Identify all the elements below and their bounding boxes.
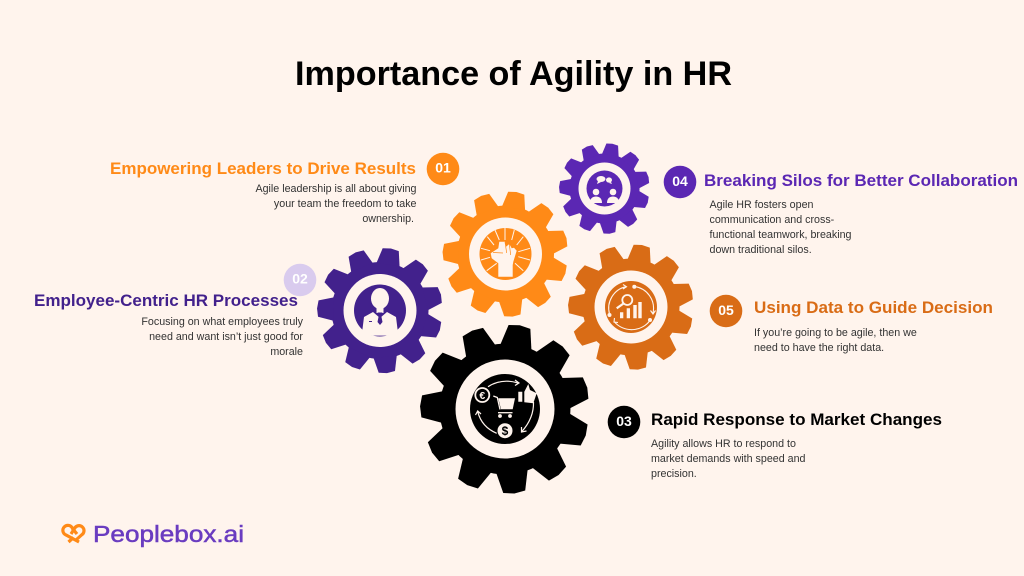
number badge 02: 02 — [292, 270, 308, 286]
step 05 — [710, 295, 993, 354]
heading 04: Breaking Silos for Better Collaboration — [704, 171, 1018, 190]
step 01 — [110, 153, 459, 225]
body 03 — [651, 438, 806, 480]
body 02 — [141, 316, 304, 358]
body 04: functional teamwork, breaking — [710, 229, 852, 241]
body 05 — [754, 327, 917, 354]
icon: cart and currency cycle — [475, 380, 537, 438]
icon: person in suit — [362, 288, 398, 336]
body 01: Agile leadership is all about giving — [255, 183, 417, 195]
icon: analytics cycle — [608, 284, 656, 330]
body 01: your team the freedom to take — [274, 198, 417, 210]
icon: two people chatting — [590, 176, 619, 203]
body 04: down traditional silos. — [710, 244, 812, 256]
body 02: morale — [270, 346, 303, 358]
step 02 — [34, 264, 316, 358]
icon: cart and currency cycle: € — [479, 390, 485, 402]
number badge 05: 05 — [718, 302, 734, 318]
icon: raised fist — [481, 228, 530, 277]
icon: cart and currency cycle: $ — [502, 424, 509, 438]
body 02: need and want isn’t just good for — [149, 331, 303, 343]
icon: logo knot — [63, 525, 84, 542]
number badge 04 — [664, 166, 696, 198]
body 03: market demands with speed and — [651, 453, 806, 465]
step 04 — [664, 166, 1018, 256]
number badge 02 — [284, 264, 316, 296]
body 03: Agility allows HR to respond to — [651, 438, 796, 450]
number badge 05 — [710, 295, 742, 327]
wordmark: Peoplebox.ai — [93, 521, 244, 547]
number badge 03: 03 — [616, 413, 632, 429]
heading 03: Rapid Response to Market Changes — [651, 410, 942, 429]
body 04: communication and cross- — [710, 214, 835, 226]
gear: navy employee — [306, 237, 454, 384]
number badge 01: 01 — [435, 160, 451, 176]
body 01 — [255, 183, 417, 225]
step 03 — [608, 406, 942, 480]
gear: orange fist — [431, 181, 579, 328]
body 04 — [710, 199, 852, 256]
heading 02: Employee-Centric HR Processes — [34, 291, 298, 310]
number badge 04: 04 — [672, 173, 688, 189]
body 02: Focusing on what employees truly — [141, 316, 304, 328]
body 01: ownership. — [362, 213, 414, 225]
title: Importance of Agility in HR — [295, 55, 732, 93]
heading 05: Using Data to Guide Decision — [754, 298, 993, 317]
number badge 03 — [608, 406, 640, 438]
gear: dark orange data — [557, 234, 705, 381]
number badge 01 — [427, 153, 459, 185]
body 05: If you’re going to be agile, then we — [754, 327, 917, 339]
body 05: need to have the right data. — [754, 342, 884, 354]
body 04: Agile HR fosters open — [710, 199, 814, 211]
gear: small purple collaboration — [551, 136, 658, 242]
heading 01: Empowering Leaders to Drive Results — [110, 159, 416, 178]
logo: Peoplebox.ai — [63, 521, 244, 547]
body 03: precision. — [651, 468, 697, 480]
gear: black market — [405, 310, 605, 509]
